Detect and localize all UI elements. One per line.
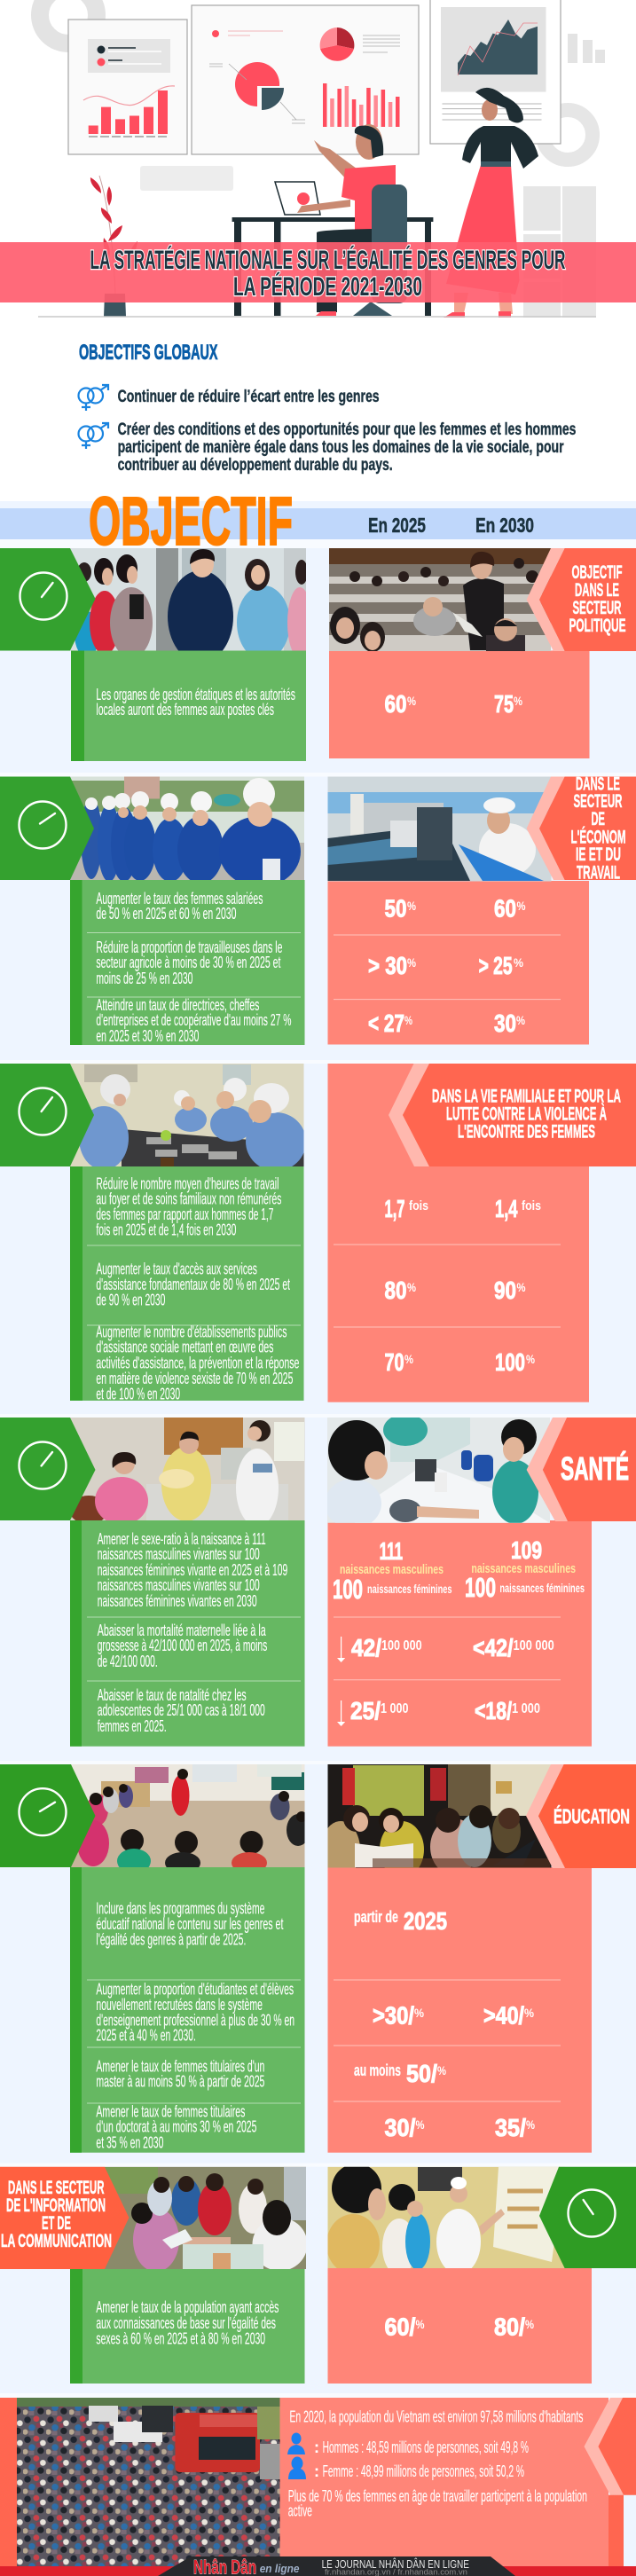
orange tag: information et communication — [0, 2167, 129, 2269]
red panel: population text — [280, 2398, 609, 2566]
green panel: objective text — [70, 1166, 303, 1403]
red panel: values: % — [524, 2006, 534, 2020]
icon: clock gauge — [20, 1088, 66, 1135]
green panel: objective text: d'assistance fondamentaux de 80 % en 2025 et — [96, 1276, 290, 1293]
icon: clock gauge — [568, 2189, 616, 2237]
red panel: values: 109 — [511, 1536, 542, 1564]
red panel: values: 60 — [494, 895, 516, 923]
orange chevron right — [584, 2398, 636, 2567]
red panel: values: % — [516, 1013, 525, 1027]
green panel: objective text: aux connaissances de base sur l'égalité des — [96, 2314, 276, 2332]
green panel: objective text: Augmenter le nombre d'établissements publics — [96, 1323, 287, 1341]
orange tag: information et communication: DE L'INFORMATION — [6, 2195, 106, 2216]
green panel: objective text — [71, 651, 306, 761]
red panel: values: 1 000 — [512, 1701, 540, 1716]
green panel: objective text: Amener le taux de la population ayant accès — [96, 2298, 279, 2316]
photo: garment worker — [328, 777, 552, 882]
orange tag: vie familiale — [389, 1064, 636, 1166]
red panel: values — [329, 651, 589, 758]
column label 2030: En 2030 — [475, 514, 534, 537]
column label 2025: En 2025 — [368, 514, 426, 537]
green panel: objective text: d'enseignement professionnel à plus de 30 % en — [96, 2012, 294, 2030]
section: politique — [0, 548, 636, 761]
heading: objectifs globaux: OBJECTIFS GLOBAUX — [79, 341, 218, 365]
red panel: values: <18/ — [475, 1697, 512, 1724]
green panel: objective text: d'un doctorat à au moins 30 % en 2025 — [96, 2118, 256, 2136]
green panel: objective text: master à au moins 50 % à partir de 2025 — [96, 2073, 264, 2091]
green panel: objective text: naissances masculines vivantes sur 100 — [98, 1545, 260, 1563]
orange tag: éducation — [526, 1764, 636, 1868]
red panel: values: % — [516, 899, 526, 913]
red panel: population text: active — [288, 2502, 312, 2520]
photo: workers in blue uniforms — [70, 777, 304, 880]
green panel: objective text: au foyer et de soins familiaux non rémunérés — [96, 1190, 281, 1208]
red panel: values: 35/ — [495, 2114, 526, 2141]
green panel: objective text — [70, 1520, 305, 1747]
red panel: values: % — [407, 899, 416, 913]
icon: clock gauge — [20, 802, 66, 848]
red panel: values: naissances masculines — [471, 1561, 576, 1576]
green panel: objective text: Abaisser la mortalité maternelle liée à la — [98, 1622, 266, 1639]
icon: grey donut decoration — [40, 0, 97, 43]
column header band — [0, 483, 636, 560]
section: information et communication — [0, 2164, 636, 2384]
center chart board — [192, 5, 419, 154]
green panel: objective text: d'entreprises et de coopérative d'au moins 27 % — [96, 1011, 291, 1029]
icon: gender symbol 1 — [78, 385, 108, 411]
red panel: values: 30 — [494, 1009, 516, 1037]
photo: hospital room — [70, 1418, 305, 1520]
red panel: values: % — [437, 2063, 446, 2077]
photo: national assembly — [329, 548, 551, 651]
title — [90, 245, 566, 302]
photo: information session — [105, 2166, 306, 2269]
green panel: objective text: en 2025 et 30 % en 2030 — [96, 1027, 199, 1045]
red panel: values: naissances masculines — [340, 1562, 444, 1577]
green panel: objective text: Atteindre un taux de directrices, cheffes — [96, 996, 259, 1014]
green chevron with clock — [539, 2167, 636, 2268]
green panel: objective text: naissances féminines vivantes en 2030 — [98, 1592, 257, 1610]
green panel: objective text: activités d'assistance, la prévention et la réponse — [96, 1355, 299, 1372]
red panel: values: 1,7 — [385, 1195, 404, 1222]
icon: woman — [288, 2457, 306, 2479]
photo: classroom — [71, 1764, 305, 1867]
red panel: values: 75 — [494, 690, 514, 718]
red panel: values: 100 000 — [513, 1638, 554, 1653]
green panel: objective text: l'égalité des genres à partir de 2025. — [96, 1931, 246, 1949]
green panel: objective text: Abaisser le taux de natalité chez les — [98, 1686, 247, 1704]
icon: man — [287, 2432, 305, 2454]
publisher name: LE JOURNAL NHÂN DÂN EN LIGNE — [322, 2557, 469, 2571]
red panel: values: 42/ — [351, 1634, 381, 1661]
red panel: values: 50/ — [406, 2060, 437, 2087]
red panel: values: % — [526, 2117, 535, 2132]
red panel: values: > 25 — [479, 952, 513, 979]
left orange bar — [0, 2398, 17, 2566]
desk and laptop — [232, 182, 433, 316]
red panel: values: % — [415, 2317, 425, 2331]
red panel: population text: : — [314, 2462, 319, 2480]
red panel: values: > 30 — [368, 952, 407, 979]
green panel: objective text: Les organes de gestion étatiques et les autorités — [96, 686, 295, 703]
red panel: values: fois — [409, 1198, 428, 1213]
green panel: objective text — [70, 880, 305, 1045]
red panel: values: % — [407, 955, 416, 970]
red panel: values: 80/ — [494, 2313, 525, 2341]
photo: women leaders — [70, 548, 306, 651]
red panel: values: % — [516, 1280, 526, 1294]
red panel: values: >40/ — [483, 2002, 524, 2030]
green panel: objective text: Amener le taux de femmes titulaires d'un — [96, 2058, 264, 2076]
photo: canteen workers — [70, 1064, 303, 1166]
orange tag: information et communication: LA COMMUNICATION — [1, 2231, 112, 2251]
green panel: objective text: femmes en 2025. — [98, 1717, 167, 1735]
red panel: values: % — [404, 1352, 413, 1366]
objective text 2 — [118, 420, 576, 475]
green panel: objective text: nouvellement recrutées dans le système — [96, 1996, 263, 2014]
green chevron — [0, 777, 94, 880]
red panel: values: 25/ — [350, 1697, 381, 1724]
orange tag: économie et travail: DE — [591, 809, 605, 829]
red panel: values: fois — [522, 1198, 541, 1213]
red panel: values: 100 — [495, 1348, 525, 1376]
section: économie et travail — [0, 774, 636, 1045]
green chevron — [0, 1064, 94, 1166]
green panel: objective text: naissances masculines vivantes sur 100 — [98, 1576, 260, 1594]
red panel: values: naissances féminines — [499, 1581, 585, 1595]
icon: clock gauge — [20, 1442, 66, 1488]
right chart board — [430, 0, 561, 144]
icon: clock gauge — [20, 573, 67, 619]
red panel: values: au moins — [354, 2062, 401, 2079]
red panel: values: % — [407, 694, 416, 708]
green panel: objective text: de 90 % en 2030 — [96, 1292, 165, 1309]
red panel: values: % — [514, 694, 522, 708]
green panel: objective text: Réduire la proportion de travailleuses dans le — [96, 939, 282, 956]
green panel: objective text: 2025 et à 40 % en 2030. — [96, 2027, 196, 2045]
red panel: values: < 27 — [368, 1009, 404, 1037]
green panel: objective text: locales auront des femmes aux postes clés — [96, 701, 274, 719]
green panel: objective text — [70, 1867, 305, 2153]
green panel: objective text — [70, 2269, 305, 2384]
header illustration — [0, 0, 636, 319]
title: LA PÉRIODE 2021-2030 — [233, 271, 422, 302]
green panel: objective text: éducatif national le contenu sur les genres et — [96, 1915, 283, 1933]
title banner — [0, 242, 636, 302]
green panel: objective text: Augmenter la proportion d'étudiantes et d'élèves — [96, 1981, 294, 1999]
filing cabinet — [523, 186, 596, 318]
red panel: values: 100 — [465, 1572, 496, 1603]
green panel: objective text: Amener le taux de femmes titulaires — [96, 2103, 245, 2121]
logo: Nhân Dân en ligne: en ligne — [260, 2562, 300, 2575]
green chevron — [0, 548, 96, 651]
red panel: values: 2025 — [404, 1907, 447, 1935]
section: éducation — [0, 1764, 636, 2153]
red panel: values: 111 — [380, 1537, 403, 1565]
icon: grey bars decoration — [568, 34, 605, 63]
plant — [90, 176, 137, 317]
red panel: values: % — [526, 1352, 535, 1366]
red panel: values: % — [525, 2317, 534, 2331]
red panel: values: 60/ — [385, 2313, 416, 2341]
green panel: objective text: sexes à 60 % en 2025 et à 80 % en 2030 — [96, 2330, 265, 2348]
green panel: objective text: des femmes par rapport aux hommes de 1,7 — [96, 1206, 273, 1223]
orange tag: information et communication: ET DE — [42, 2213, 71, 2234]
orange tag: information et communication: DANS LE SECTEUR — [8, 2178, 105, 2198]
green panel: objective text: moins de 25 % en 2030 — [96, 970, 192, 987]
red panel: values — [328, 1520, 592, 1747]
green panel: objective text: Augmenter le taux d'accès aux services — [96, 1261, 257, 1278]
green panel: objective text: fois en 2025 et de 1,4 fois en 2030 — [96, 1221, 236, 1239]
red panel: population text: : — [314, 2439, 319, 2456]
red panel: values: % — [407, 1280, 416, 1294]
red panel: values: % — [404, 1013, 412, 1027]
green panel: objective text: Amener le sexe-ratio à la naissance à 111 — [98, 1530, 266, 1548]
red panel: values: % — [415, 2117, 425, 2132]
red panel: values: partir de — [354, 1908, 398, 1926]
red panel: values: 50 — [385, 895, 406, 923]
icon: clock gauge — [20, 1788, 66, 1835]
green panel: objective text: secteur agricole à moins de 30 % en 2025 et — [96, 954, 280, 971]
icon: right donut decoration — [543, 110, 593, 160]
red panel: values: 1,4 — [495, 1195, 518, 1222]
green panel: objective text: et de 100 % en 2030 — [96, 1386, 180, 1403]
photo: women teachers — [328, 1764, 552, 1868]
left chart board — [68, 20, 187, 154]
green panel: objective text: naissances féminines vivante en 2025 et à 109 — [98, 1561, 287, 1579]
section: vie familiale — [0, 1064, 636, 1403]
red panel: values: 100 — [333, 1574, 363, 1605]
orange tag: santé — [527, 1418, 636, 1521]
green panel: objective text: d'assistance sociale mettant en œuvre des — [96, 1339, 273, 1356]
green panel: objective text: et 35 % en 2030 — [96, 2134, 163, 2152]
red panel: values — [328, 881, 589, 1045]
heading: objectif: OBJECTIF — [89, 483, 293, 560]
red panel: values: 100 000 — [381, 1638, 422, 1653]
green chevron — [0, 1764, 96, 1867]
man at desk — [297, 124, 407, 316]
red panel: values: % — [514, 955, 523, 970]
red panel: values — [328, 1064, 589, 1402]
section: santé — [0, 1414, 636, 1747]
red panel: values — [328, 2268, 592, 2384]
photo: nurses — [327, 1418, 550, 1523]
green panel: objective text: Inclure dans les programmes du système — [96, 1900, 264, 1918]
green chevron — [0, 1418, 96, 1520]
grey card — [140, 166, 233, 191]
photo: nurse with poster — [328, 2166, 564, 2268]
red panel: values: 70 — [385, 1348, 404, 1376]
photo: motorbike traffic — [17, 2398, 280, 2566]
standing woman — [444, 88, 538, 318]
orange tag: économie et travail — [527, 774, 636, 884]
objective text 2: contribuer au développement durable du pays. — [118, 456, 393, 475]
red panel: values: 80 — [385, 1276, 406, 1304]
red panel: values: 1 000 — [381, 1701, 409, 1716]
red panel: values — [328, 1867, 592, 2153]
icon: gender symbol 2 — [78, 423, 108, 449]
red panel: values: naissances féminines — [367, 1582, 452, 1596]
green panel: objective text: en matière de violence sexiste de 70 % en 2025 — [96, 1370, 293, 1387]
orange tag: politique — [527, 548, 636, 651]
green panel: objective text: de 50 % en 2025 et 60 % en 2030 — [96, 905, 236, 923]
section: population — [0, 2398, 636, 2567]
red panel: values: 90 — [494, 1276, 516, 1304]
green panel: objective text: Augmenter le taux des femmes salariées — [96, 890, 263, 907]
red panel: values: <42/ — [473, 1634, 514, 1661]
green panel: objective text: grossesse à 42/100 000 en 2025, à moins — [98, 1637, 267, 1654]
red panel: values: 30/ — [385, 2114, 416, 2141]
green panel: objective text: de 42/100 000. — [98, 1653, 158, 1670]
red panel: values: % — [414, 2006, 424, 2020]
objective text 1: Continuer de réduire l’écart entre les genres — [118, 388, 380, 406]
green panel: objective text: Réduire le nombre moyen d'heures de travail — [96, 1175, 279, 1193]
green panel: objective text: adolescentes de 25/1 000 cas à 18/1 000 — [98, 1701, 265, 1719]
footer — [0, 2556, 636, 2576]
red panel: values: 60 — [385, 690, 406, 718]
red panel: values: >30/ — [373, 2002, 414, 2030]
